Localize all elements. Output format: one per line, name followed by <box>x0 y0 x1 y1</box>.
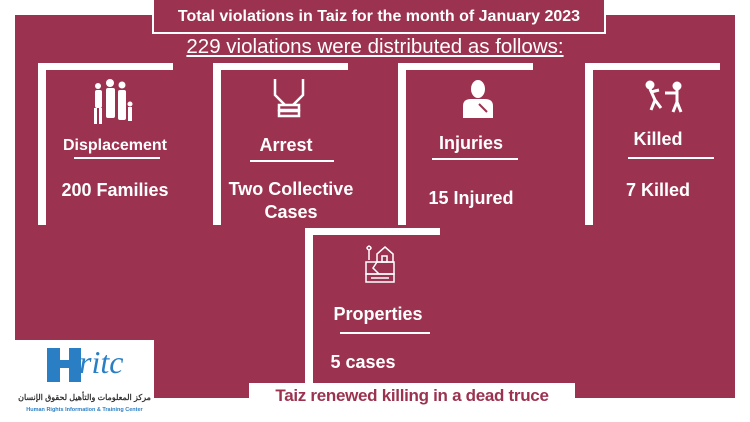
label: Arrest <box>259 135 313 155</box>
logo: ritc <box>79 344 123 380</box>
icon: cuffed hands <box>274 79 304 118</box>
logo <box>15 340 154 422</box>
label: Properties <box>333 304 423 324</box>
panel: properties <box>305 228 440 383</box>
value: 5 cases <box>330 352 396 372</box>
icon: damaged house <box>365 245 395 283</box>
logo: Human Rights Information & Training Center <box>26 407 143 413</box>
logo: مركز المعلومات والتأهيل لحقوق الإنسان <box>18 393 151 402</box>
panel: arrest <box>213 63 353 225</box>
banner: Taiz renewed killing in a dead truce <box>275 386 549 405</box>
subtitle: 229 violations were distributed as follows: <box>186 35 564 58</box>
value: Cases <box>264 202 318 222</box>
panel: displacement <box>38 63 173 225</box>
icon: injured person <box>463 80 493 118</box>
label: Killed <box>633 129 682 149</box>
title box <box>152 0 606 34</box>
title box: Total violations in Taiz for the month of January 2023 <box>178 8 580 25</box>
label: Displacement <box>63 137 167 154</box>
value: 15 Injured <box>428 188 514 208</box>
panel: injuries <box>398 63 533 225</box>
icon: displaced family <box>94 79 132 124</box>
value: Two Collective <box>229 179 353 199</box>
value: 7 Killed <box>626 180 690 200</box>
icon: shooting <box>646 80 682 112</box>
banner <box>249 383 575 409</box>
value <box>228 179 353 222</box>
panel: killed <box>585 63 720 225</box>
value: 200 Families <box>61 180 169 200</box>
label: Injuries <box>439 133 503 153</box>
